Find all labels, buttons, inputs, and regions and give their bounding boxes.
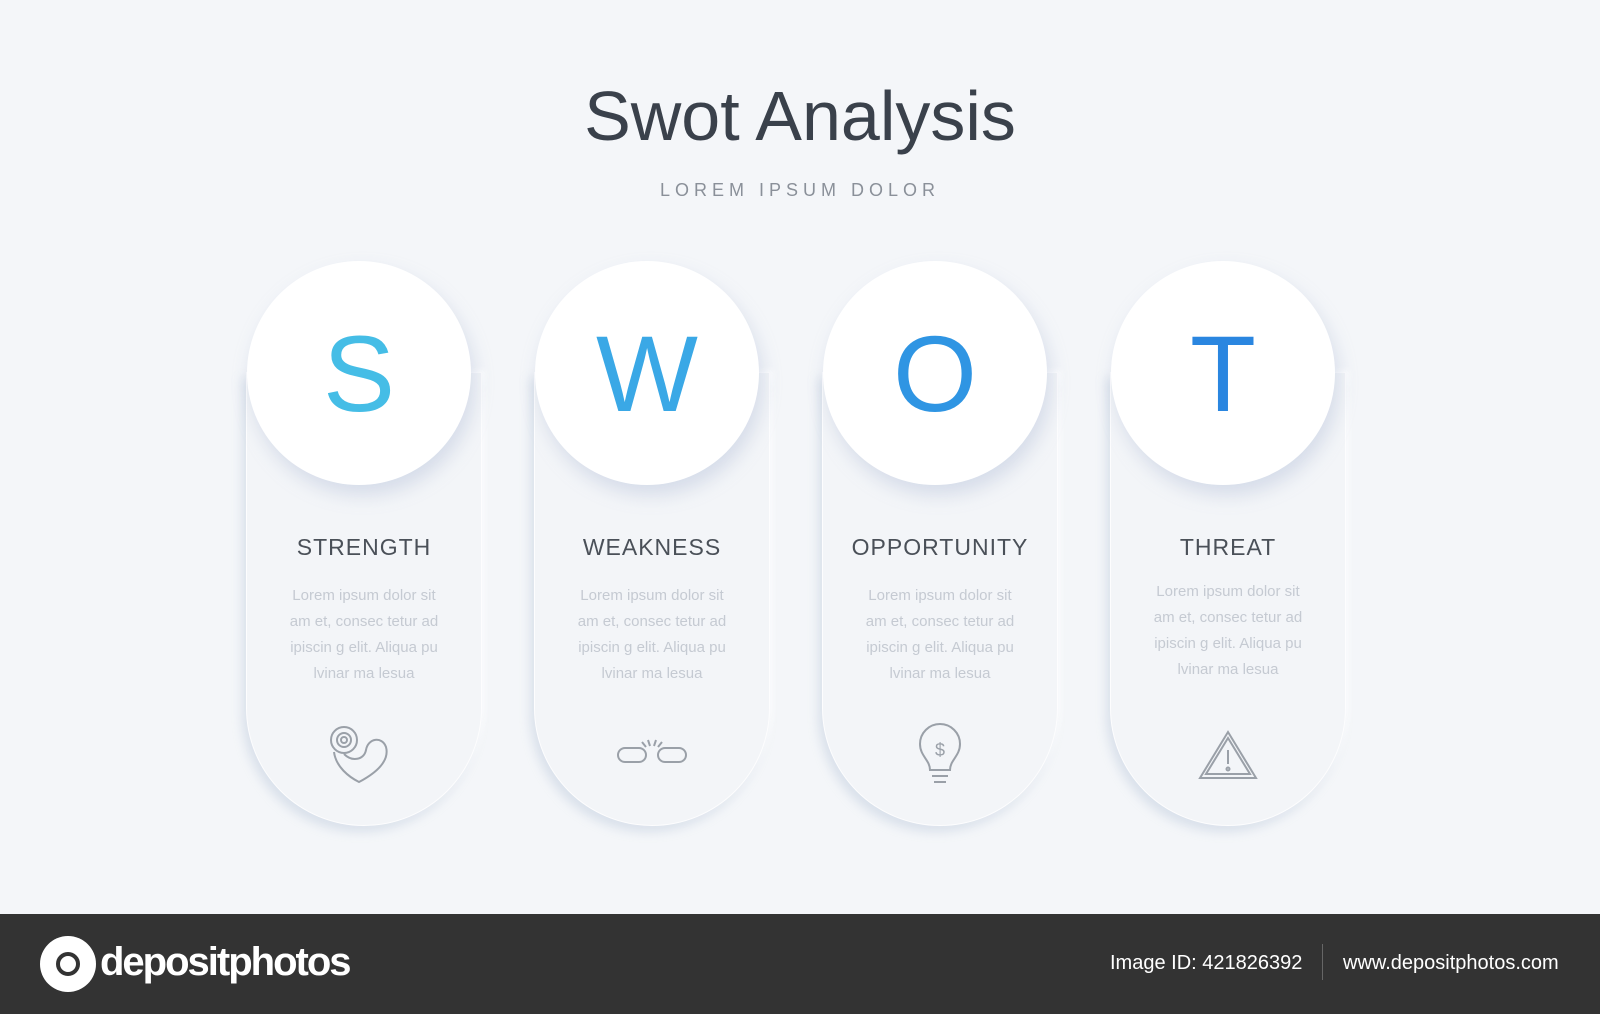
text opportunity: Lorem ipsum dolor sit [868, 587, 1012, 604]
website: www.depositphotos.com [1343, 952, 1559, 974]
panel: opportunity [814, 261, 1058, 834]
text opportunity: lvinar ma lesua [890, 665, 990, 682]
text strength: Lorem ipsum dolor sit [292, 587, 436, 604]
circle W [535, 261, 759, 485]
text threat: lvinar ma lesua [1178, 661, 1278, 678]
footer bar [0, 914, 1600, 1014]
circle T: T [1190, 312, 1256, 434]
circle W: W [596, 312, 698, 434]
panel: weakness [526, 261, 770, 834]
icon: lightbulb [919, 723, 961, 783]
text weakness: lvinar ma lesua [602, 665, 702, 682]
text weakness: Lorem ipsum dolor sit [580, 587, 724, 604]
text threat: ipiscin g elit. Aliqua pu [1154, 635, 1302, 652]
icon: camera logo [40, 936, 96, 992]
text opportunity: am et, consec tetur ad [866, 613, 1014, 630]
text weakness: am et, consec tetur ad [578, 613, 726, 630]
logo: depositphotos [100, 940, 350, 984]
circle O [823, 261, 1047, 485]
text weakness: ipiscin g elit. Aliqua pu [578, 639, 726, 656]
panel: threat [1102, 261, 1346, 834]
text threat: Lorem ipsum dolor sit [1156, 583, 1300, 600]
circle S: S [323, 312, 395, 434]
text strength: lvinar ma lesua [314, 665, 414, 682]
circle O: O [893, 312, 977, 434]
icon: muscle [330, 726, 388, 783]
heading opportunity: OPPORTUNITY [852, 534, 1028, 560]
panel: strength [238, 261, 482, 834]
text strength: ipiscin g elit. Aliqua pu [290, 639, 438, 656]
text threat [1154, 583, 1302, 678]
subtitle: LOREM IPSUM DOLOR [660, 180, 940, 200]
title: Swot Analysis [584, 77, 1016, 155]
heading threat: THREAT [1180, 534, 1276, 560]
text threat: am et, consec tetur ad [1154, 609, 1302, 626]
image id: Image ID: 421826392 [1110, 952, 1302, 974]
circle T [1111, 261, 1335, 485]
text weakness [578, 587, 726, 682]
icon: broken chain [617, 740, 687, 763]
icon: warning [1198, 730, 1258, 779]
icon: lightbulb: $ [935, 740, 945, 760]
heading weakness: WEAKNESS [583, 534, 721, 560]
text strength: am et, consec tetur ad [290, 613, 438, 630]
heading strength: STRENGTH [297, 534, 431, 560]
text strength [290, 587, 438, 682]
text opportunity: ipiscin g elit. Aliqua pu [866, 639, 1014, 656]
circle S [247, 261, 471, 485]
logo [40, 936, 350, 992]
text opportunity [866, 587, 1014, 682]
